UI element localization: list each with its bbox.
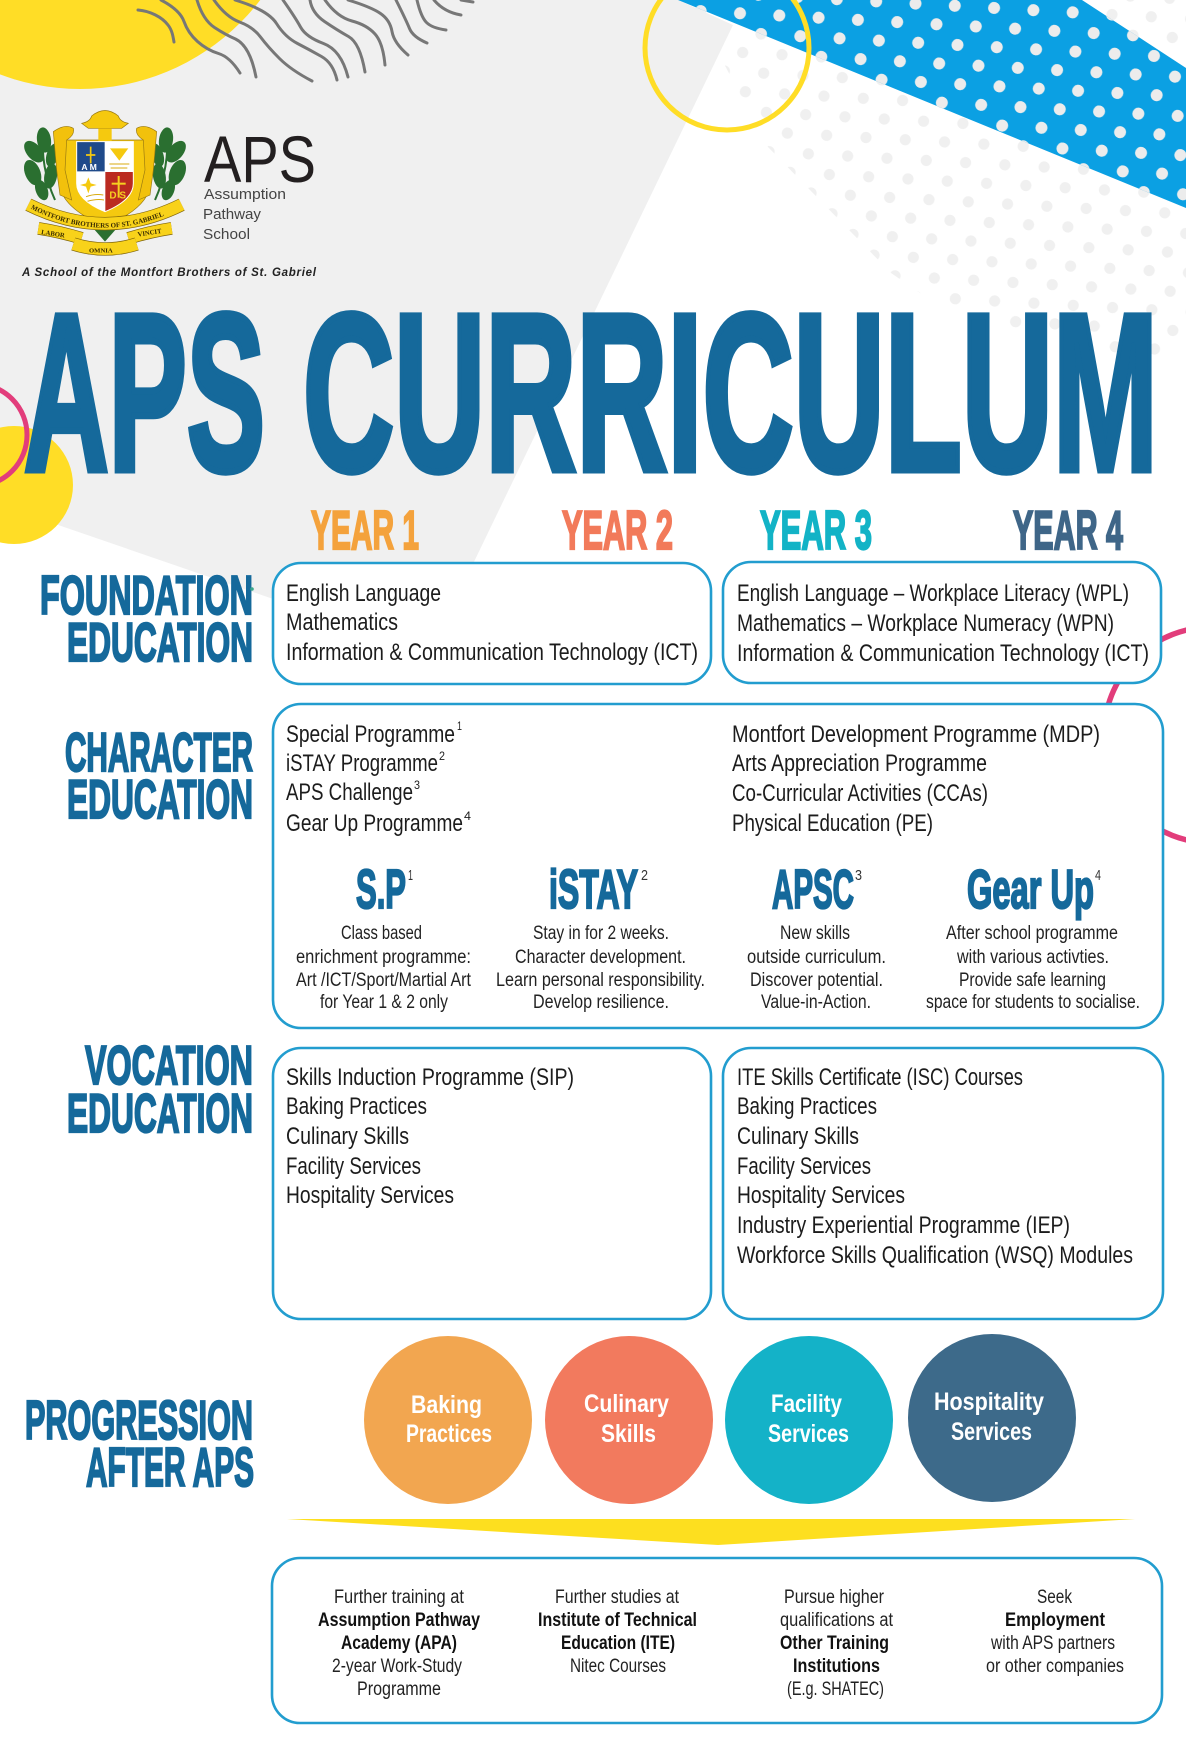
panel: foundation years 1-2: English Language [286, 580, 441, 607]
column: S.P [296, 858, 472, 1013]
panel: vocation years 1-2: Culinary Skills [286, 1123, 409, 1150]
programme list right: Co-Curricular Activities (CCAs) [732, 780, 988, 807]
panel: vocation years 1-2: Hospitality Services [286, 1182, 454, 1209]
panel: vocation years 3-4: Industry Experiential Programme (IEP) [737, 1212, 1070, 1239]
heading: progression after APS [25, 1389, 254, 1498]
pathway: other training institutions: Other Training [780, 1633, 889, 1654]
panel: vocation years 3-4: Facility Services [737, 1153, 871, 1180]
year headers: YEAR 3 [760, 499, 872, 561]
column: iSTAY: iSTAY [549, 858, 638, 920]
programme list right: Physical Education (PE) [732, 810, 933, 837]
arrow: yellow down chevron [287, 1519, 1135, 1545]
school crest: VINCIT [137, 228, 163, 239]
pathway: APA [318, 1587, 480, 1700]
column: Gear Up [926, 858, 1140, 1013]
programme list left [286, 719, 471, 837]
pathway: other training institutions: (E.g. SHATEC) [787, 1679, 884, 1700]
heading: character education: EDUCATION [67, 768, 253, 830]
panel: vocation years 1-2: Facility Services [286, 1153, 421, 1180]
circle: baking practices: Baking [411, 1391, 482, 1419]
column: iSTAY: Stay in for 2 weeks. [533, 923, 669, 944]
pathway: employment: with APS partners [990, 1633, 1115, 1654]
circle: culinary skills [545, 1336, 713, 1504]
programme list left: 4 [464, 809, 471, 823]
school crest: A M [81, 162, 97, 172]
column: iSTAY [496, 858, 705, 1013]
column: S.P: S.P [356, 858, 406, 920]
school tagline: A School of the Montfort Brothers of St. Gabriel [21, 267, 317, 279]
circle: hospitality services: Services [951, 1418, 1032, 1446]
panel: vocation years 1-2 [273, 1048, 711, 1319]
programme list left: 2 [439, 749, 445, 763]
school crest: D S [109, 190, 126, 201]
panel: vocation years 1-2: Skills Induction Programme (SIP) [286, 1064, 574, 1091]
column: iSTAY: Develop resilience. [533, 992, 669, 1013]
panel: character education [273, 704, 1163, 1028]
year headers [311, 499, 1123, 561]
school crest: LABOR [41, 229, 65, 240]
pathway: APA: 2-year Work-Study [332, 1656, 462, 1677]
panel: pathways after APS [272, 1558, 1162, 1723]
panel: vocation years 3-4: Hospitality Services [737, 1182, 905, 1209]
heading: progression after APS: PROGRESSION [25, 1389, 253, 1451]
circle: baking practices: Practices [406, 1420, 492, 1448]
programme list left: Gear Up Programme [286, 810, 463, 837]
heading: vocation education [67, 1034, 253, 1144]
pathway: employment [986, 1587, 1124, 1677]
yellow ring [645, 0, 809, 130]
circle: culinary skills: Culinary [584, 1390, 669, 1418]
programme list left: iSTAY Programme [286, 750, 438, 777]
year headers: YEAR 1 [311, 499, 419, 561]
column: APSC: Discover potential. [750, 970, 883, 991]
programme list left: Special Programme [286, 721, 455, 748]
panel: vocation years 3-4 [723, 1048, 1163, 1319]
column: iSTAY: Character development. [515, 947, 686, 968]
heading: foundation education [40, 564, 254, 673]
column: iSTAY: 2 [641, 867, 648, 884]
panel: vocation years 3-4: Baking Practices [737, 1093, 877, 1120]
pathway: employment: Seek [1037, 1587, 1072, 1608]
pathway: ITE [538, 1587, 697, 1677]
column: Gear Up: Provide safe learning [959, 970, 1106, 991]
panel: vocation years 3-4: ITE Skills Certificate (ISC) Courses [737, 1064, 1023, 1091]
pathway: other training institutions: Pursue higher [784, 1587, 885, 1608]
column: iSTAY: Learn personal responsibility. [496, 970, 705, 991]
column: APSC: 3 [855, 867, 862, 884]
pathway: APA: Assumption Pathway [318, 1610, 480, 1631]
APS wordmark: School [203, 226, 250, 243]
pathway: other training institutions [780, 1587, 894, 1700]
school crest: OMNIA [89, 248, 113, 255]
panel: foundation years 1-2: Mathematics [286, 609, 398, 636]
programme list right: Arts Appreciation Programme [732, 750, 987, 777]
circle: hospitality services [908, 1334, 1076, 1502]
panel: vocation years 1-2: Baking Practices [286, 1093, 427, 1120]
heading: vocation education: EDUCATION [67, 1082, 253, 1144]
APS wordmark: Pathway [203, 206, 261, 223]
circle: facility services [725, 1336, 893, 1504]
column: APSC: Value-in-Action. [761, 992, 871, 1013]
circle: facility services: Facility [771, 1390, 842, 1418]
heading: foundation education: EDUCATION [67, 611, 253, 673]
column: S.P: for Year 1 & 2 only [320, 992, 448, 1013]
decorative wavy lines [138, 0, 473, 81]
year headers: YEAR 2 [562, 499, 673, 561]
column: APSC: APSC [772, 858, 854, 920]
circle: baking practices [364, 1336, 532, 1504]
pathway: APA: Further training at [334, 1587, 465, 1608]
column: Gear Up: space for students to socialise. [926, 992, 1140, 1013]
pathway: ITE: Education (ITE) [561, 1633, 675, 1654]
panel: foundation years 3-4 [723, 562, 1161, 683]
pathway: employment: or other companies [986, 1656, 1124, 1677]
panel: foundation years 1-2 [273, 563, 711, 684]
column: Gear Up: with various activties. [956, 947, 1109, 968]
heading: vocation education: VOCATION [85, 1034, 253, 1096]
pathway: employment: Employment [1005, 1610, 1106, 1631]
programme list left: 3 [414, 778, 420, 792]
column: S.P: 1 [408, 867, 413, 884]
school crest: MONTFORT BROTHERS OF ST. GABRIEL [30, 204, 164, 228]
APS wordmark: APS [204, 122, 316, 196]
APS wordmark [203, 122, 316, 243]
pathway: other training institutions: Institutions [793, 1656, 880, 1677]
pathway: other training institutions: qualifications at [780, 1610, 894, 1631]
circle: culinary skills: Skills [601, 1420, 656, 1448]
panel: foundation years 1-2: Information & Communication Technology (ICT) [286, 639, 698, 666]
school crest [24, 110, 186, 256]
column: APSC [747, 858, 886, 1013]
heading: character education [65, 721, 253, 830]
column: S.P: Art /ICT/Sport/Martial Art [296, 970, 472, 991]
heading: foundation education: FOUNDATION [40, 564, 253, 626]
column: S.P: enrichment programme: [296, 947, 471, 968]
pathway: APA: Academy (APA) [341, 1633, 457, 1654]
pathway: ITE: Nitec Courses [570, 1656, 666, 1677]
APS wordmark: Assumption [204, 186, 286, 203]
column: Gear Up: 4 [1095, 867, 1101, 884]
programme list right [732, 721, 1100, 837]
circle: hospitality services: Hospitality [934, 1388, 1044, 1416]
pathway: ITE: Institute of Technical [538, 1610, 697, 1631]
circle: facility services: Services [768, 1420, 849, 1448]
pathway: APA: Programme [357, 1679, 441, 1700]
pathway: ITE: Further studies at [555, 1587, 680, 1608]
panel: vocation years 3-4: Culinary Skills [737, 1123, 859, 1150]
column: S.P: Class based [341, 923, 422, 944]
column: Gear Up: Gear Up [967, 858, 1094, 920]
dotted blue band [678, 0, 1186, 208]
column: APSC: New skills [780, 923, 850, 944]
programme list left: APS Challenge [286, 779, 413, 806]
column: APSC: outside curriculum. [747, 947, 886, 968]
heading: progression after APS: AFTER APS [86, 1436, 254, 1498]
column: Gear Up: After school programme [946, 923, 1118, 944]
heading: character education: CHARACTER [65, 721, 253, 783]
programme list left: 1 [457, 719, 462, 733]
programme list right: Montfort Development Programme (MDP) [732, 721, 1100, 748]
title: APS [24, 268, 265, 518]
